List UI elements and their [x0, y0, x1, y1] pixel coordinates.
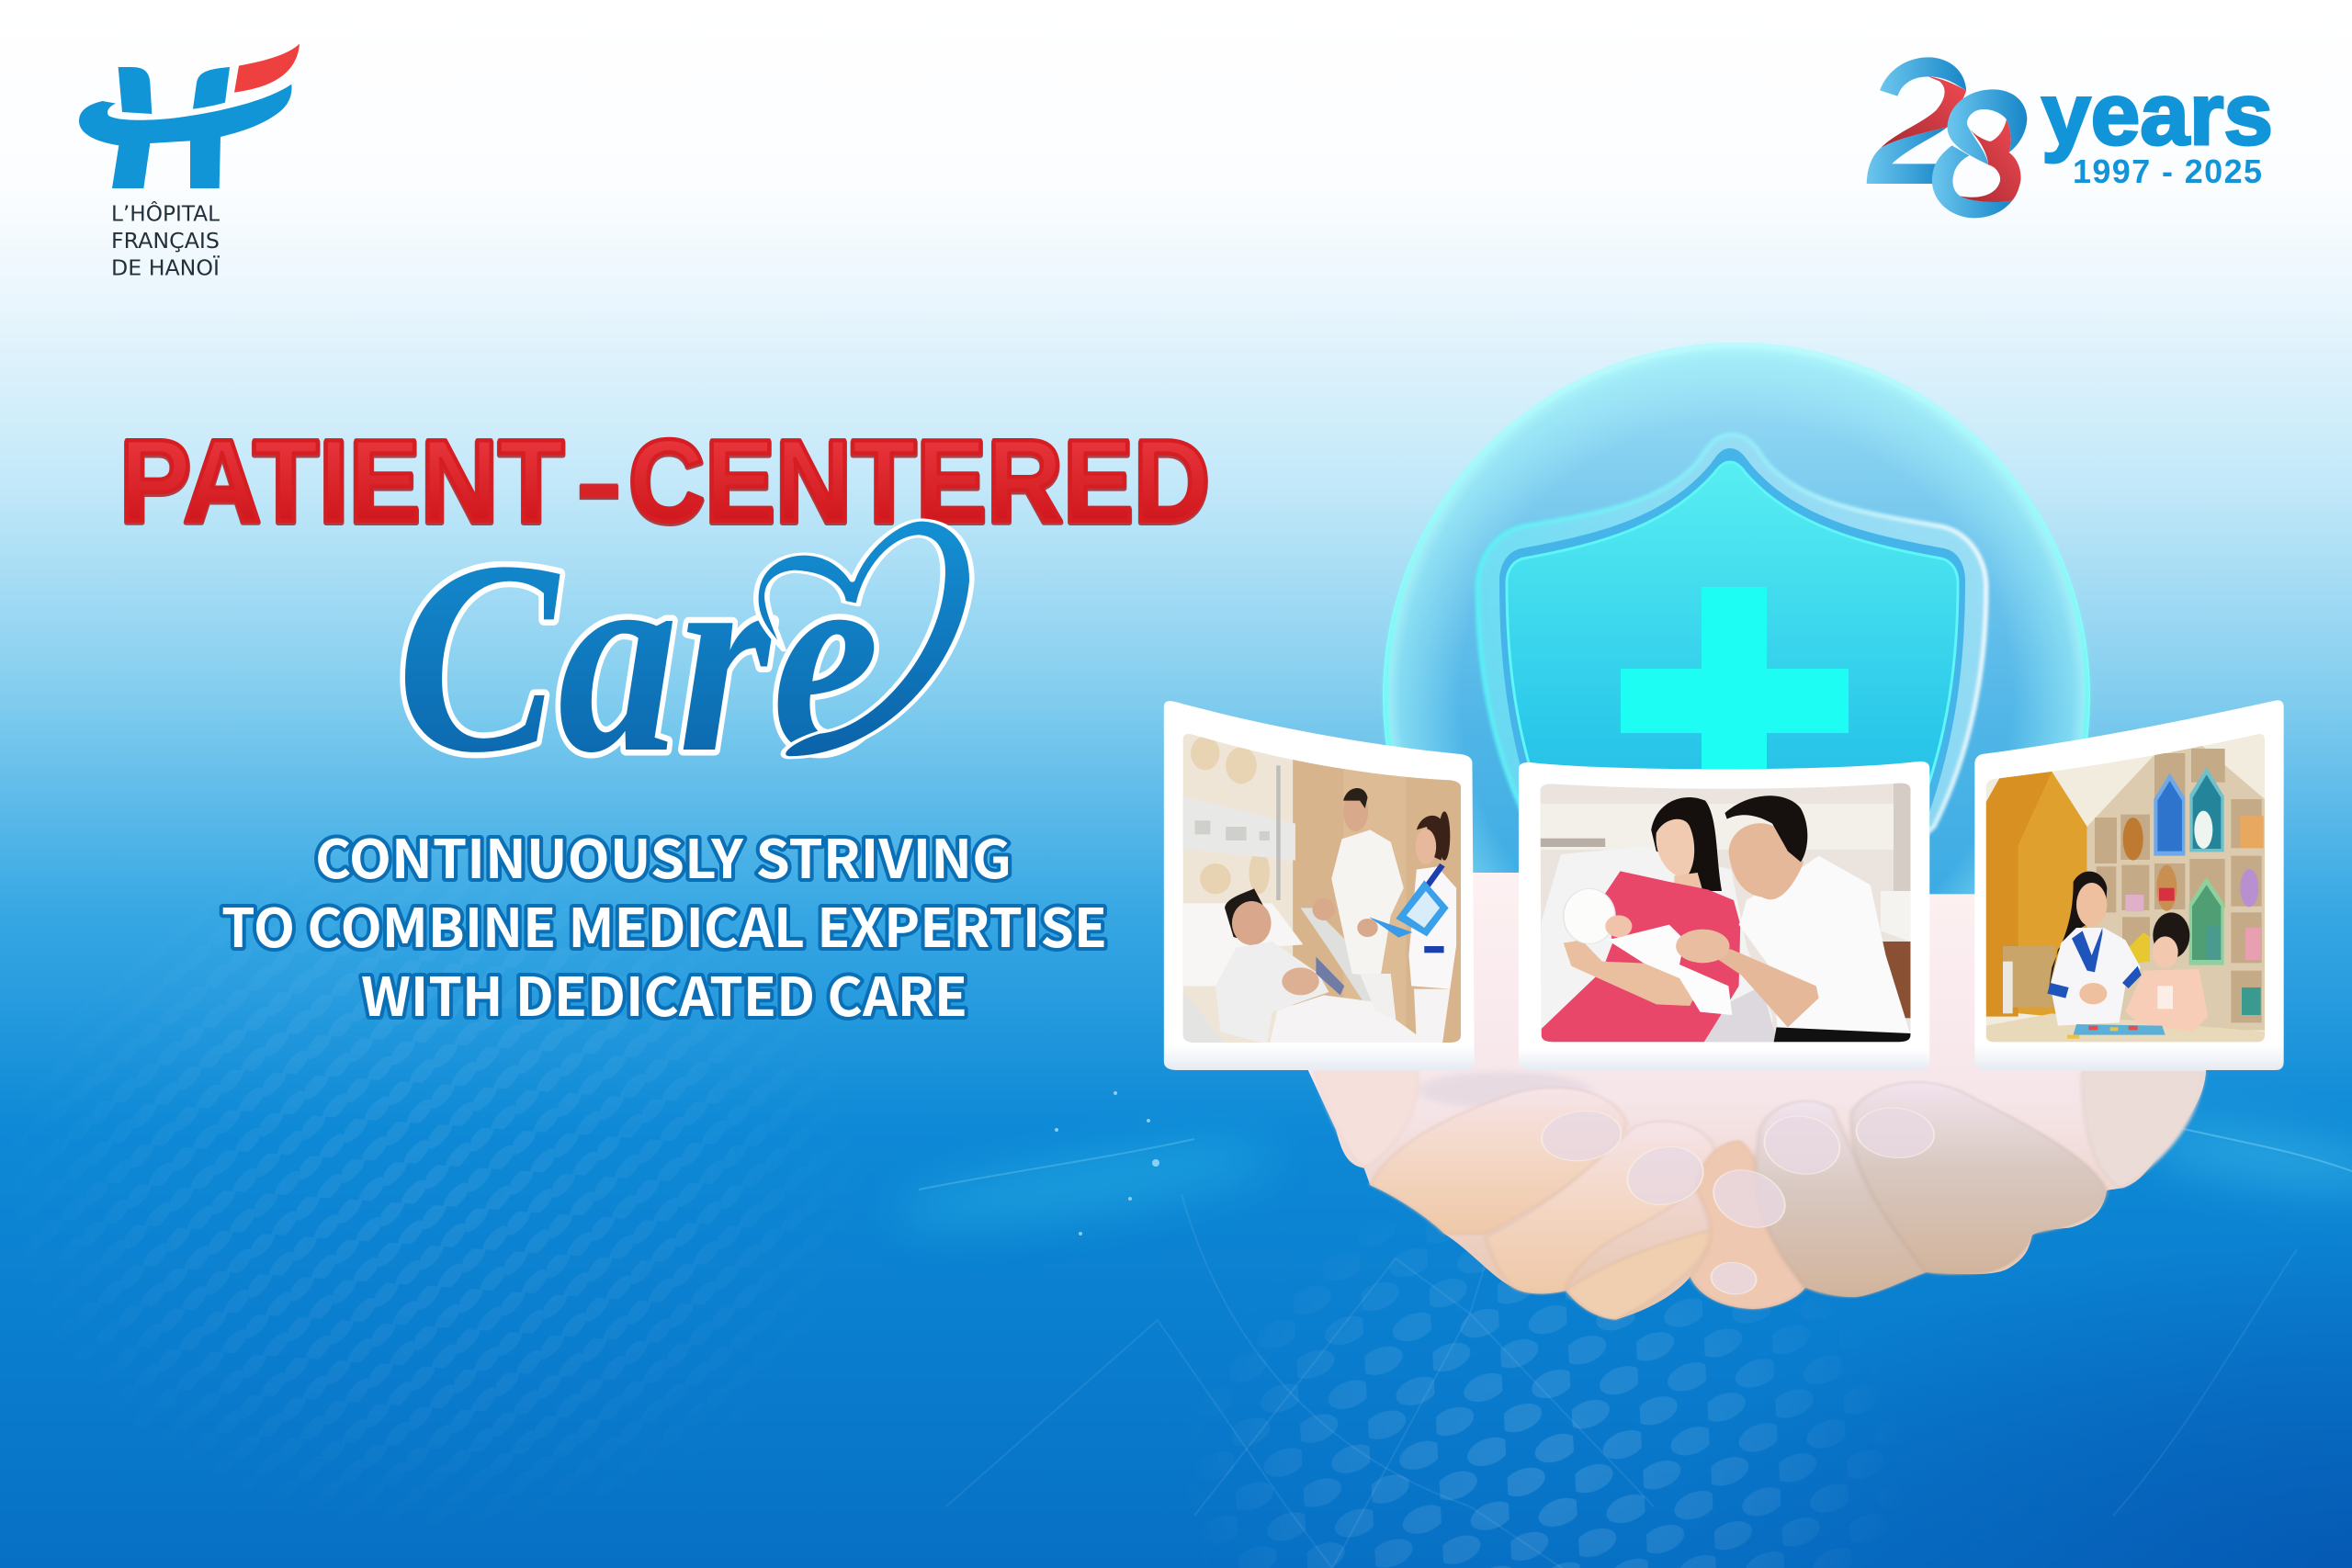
photo: family scene [1538, 781, 1914, 1044]
medical cross [1621, 587, 1849, 790]
title: Patient-Centered: - [574, 417, 624, 547]
photo: hospital room scene [1180, 728, 1463, 1047]
logo wordmark [111, 200, 220, 281]
background dot texture right [1248, 1251, 1839, 1568]
subtitle text: CONTINUOUSLY STRIVING [315, 817, 1012, 894]
icon: H wing mark [79, 44, 300, 188]
logo wordmark: L’HÔPITAL [111, 200, 220, 226]
title: Patient-Centered: - [574, 415, 624, 546]
shield outer rim [1477, 434, 1986, 1010]
logo: 28 years 1997-2025 [1867, 57, 2273, 218]
logo: L'Hôpital Français de Hanoï [79, 44, 300, 280]
right little finger [2082, 1072, 2205, 1188]
left middle finger [1485, 1122, 1715, 1293]
title: Patient-Centered: PATIENT [119, 415, 564, 546]
cupped hands [1308, 873, 2206, 1320]
glowing bubble [1383, 343, 2090, 1050]
hand silhouette [1308, 873, 2206, 1320]
card frame [1974, 700, 2284, 1070]
left ring finger [1566, 1228, 1718, 1320]
shield inner blue gap [1499, 448, 1965, 997]
years label: years [2041, 65, 2273, 164]
right inner finger [1756, 1101, 1927, 1297]
date range: 1997 - 2025 [2073, 152, 2262, 190]
fingernails [1532, 1105, 1940, 1295]
shield inner face [1507, 462, 1958, 992]
left index finger [1370, 1088, 1627, 1234]
title: Patient-Centered [119, 415, 1210, 547]
background corner shade [1194, 1010, 2352, 1568]
photo: play room scene [1984, 732, 2267, 1044]
shield with medical cross [1477, 434, 1986, 1010]
background light streaks [890, 1091, 2352, 1239]
subtitle text: TO COMBINE MEDICAL EXPERTISE [221, 886, 1107, 963]
right outer finger [1851, 1082, 2107, 1274]
lower thumb tip [1690, 1141, 1805, 1309]
icon: ribbon numerals 28 [1867, 57, 2027, 218]
card frame [1164, 701, 1475, 1070]
heart flourish [756, 520, 972, 758]
photo card center: new parents with baby [1519, 761, 1929, 1070]
card frame [1519, 761, 1929, 1070]
background dot texture left [145, 970, 718, 1420]
Care word: Care [397, 504, 879, 809]
photo card right: nurse with child in play room [1974, 700, 2284, 1070]
title: Patient-Centered: CENTERED [628, 417, 1210, 547]
subtitle text [221, 817, 1107, 1032]
title script: Care with heart flourish [397, 504, 972, 809]
title: Patient-Centered: PATIENT [119, 417, 564, 547]
photo card left: doctor visiting patient [1164, 701, 1475, 1070]
logo wordmark: FRANÇAIS [111, 228, 220, 254]
title: Patient-Centered: CENTERED [628, 415, 1210, 546]
palm shadow center [1417, 1072, 1590, 1109]
subtitle text: WITH DEDICATED CARE [361, 954, 967, 1032]
background network lines [946, 1194, 2297, 1568]
logo wordmark: DE HANOÏ [111, 255, 220, 281]
left little finger [1314, 1072, 1419, 1168]
